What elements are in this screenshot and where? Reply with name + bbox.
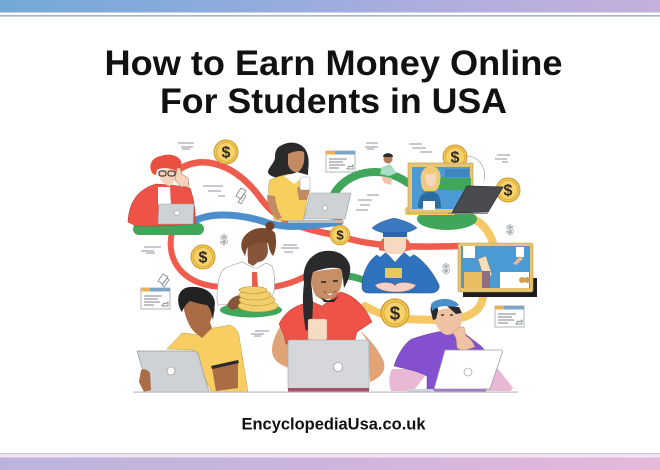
person: red jacket man [128,155,204,235]
small dollar signs, sketch lines and note cards [141,143,524,336]
person: man in white shirt with pancake stack [217,222,282,318]
title [104,43,562,121]
person: small figure on green path [380,153,397,185]
yellow path [472,218,494,246]
small dollar signs, sketch lines and note cards: $ [442,261,450,276]
ground line [133,392,518,393]
footer website label: EncyclopediaUsa.co.uk [242,416,426,434]
person: woman with yellow top [267,143,351,223]
top gradient band [0,0,660,17]
title: For Students in USA [160,81,507,121]
blue path [190,215,340,226]
person: man in yellow shirt with laptop [137,287,248,392]
green path [333,172,408,196]
small dollar signs, sketch lines and note cards: $ [506,222,514,237]
person: graduate in blue [362,218,439,293]
red path [176,162,460,247]
yellow framed panel with black shadow [458,243,537,297]
monitor with video call and black laptop [405,163,503,230]
small dollar signs, sketch lines and note cards: $ [220,232,228,247]
connecting paths [171,156,494,320]
person: woman in red shirt with laptop [272,251,384,392]
title: How to Earn Money Online [104,43,562,83]
coins [191,140,520,327]
person: man in purple shirt with white laptop [389,299,513,392]
bottom gradient band [0,453,660,470]
